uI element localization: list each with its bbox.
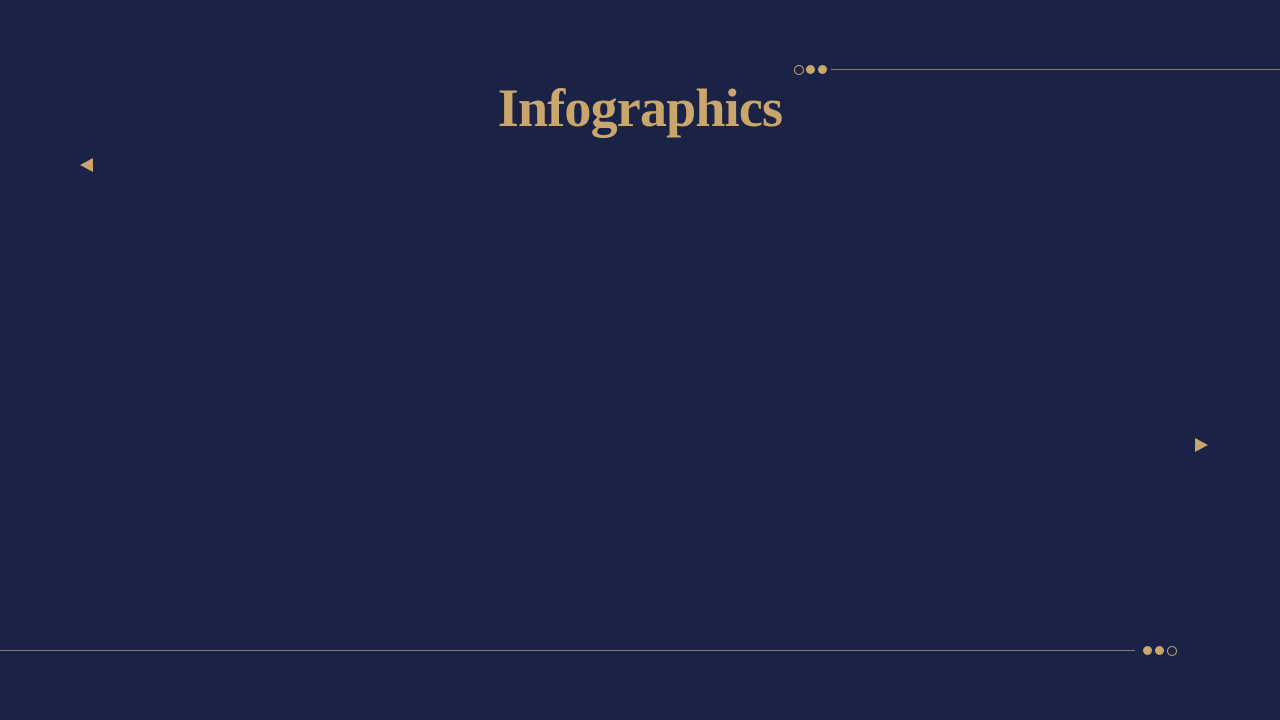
bottom decoration: line and dots xyxy=(0,646,1177,656)
icon: right arrow xyxy=(1195,438,1208,452)
title: Infographics xyxy=(498,78,782,138)
top decoration: dots and line xyxy=(794,65,1280,75)
icon: left arrow xyxy=(80,158,93,172)
